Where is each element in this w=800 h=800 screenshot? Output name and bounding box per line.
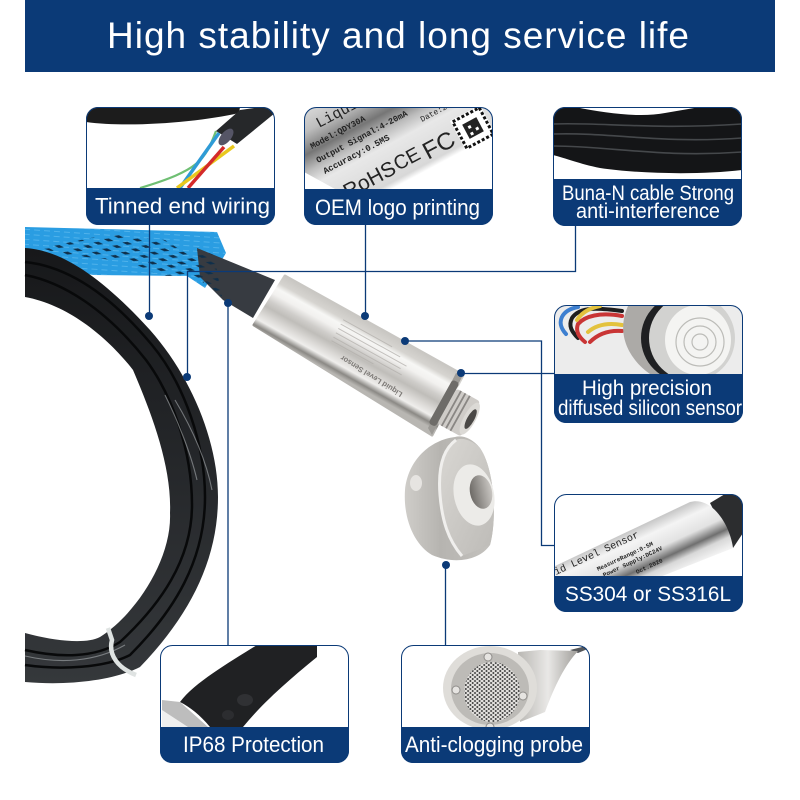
product photo: sensor cable gland	[197, 248, 275, 318]
panel: OEM logo printing: RoHS	[340, 157, 400, 203]
panel: Buna-N cable	[553, 107, 742, 226]
panel: diffused silicon sensor: diffused silicon sensor	[558, 397, 742, 420]
panel: stainless steel SS304 or SS316L: Oct.2020	[635, 557, 664, 576]
panel: OEM logo printing: Output Signal:4-20mA	[315, 109, 410, 166]
product photo: blue protective net	[25, 227, 226, 288]
product photo: stainless steel protective cap	[405, 436, 500, 560]
panel: tinned end wiring	[86, 105, 275, 225]
panel: IP68 protection: IP68 Protection	[183, 732, 324, 757]
product photo: stainless steel sensor body	[254, 276, 488, 443]
panel: diffused silicon sensor: High precision	[582, 377, 712, 400]
panel: OEM logo printing: OEM logo printing	[315, 195, 480, 220]
title banner: High stability and long service life	[107, 15, 689, 56]
panel: stainless steel SS304 or SS316L: id Level Sensor	[553, 530, 641, 579]
panel: Buna-N cable: Buna-N cable Strong	[562, 182, 734, 205]
product photo: coiled black cable	[25, 248, 218, 683]
panel: Buna-N cable: anti-interference	[576, 200, 720, 223]
panel: anti-clogging probe: Anti-clogging probe	[405, 732, 583, 757]
panel: OEM logo printing: CE	[390, 143, 424, 175]
panel: OEM logo printing: Model:QDY30A	[309, 114, 368, 152]
leader lines and marker dots	[150, 225, 576, 645]
panel: diffused silicon sensor	[554, 294, 743, 423]
panel: OEM logo printing: Accuracy:0.5MS	[322, 133, 392, 177]
panel: stainless steel SS304 or SS316L: MeasureRange:0-5M	[596, 540, 655, 573]
panel: anti-clogging probe	[401, 645, 590, 763]
panel: OEM logo printing	[304, 96, 496, 225]
panel: OEM logo printing: FC	[418, 126, 460, 165]
panel: stainless steel SS304 or SS316L	[553, 494, 743, 612]
panel: IP68 protection	[160, 645, 349, 763]
title banner	[25, 0, 775, 72]
panel: OEM logo printing: Liqui	[313, 96, 361, 132]
panel: tinned end wiring: Tinned end wiring	[95, 194, 270, 218]
panel: stainless steel SS304 or SS316L: SS304 or SS316L	[565, 583, 731, 606]
sensor engraved label: Liquid Level Sensor	[339, 353, 404, 399]
threaded connector	[428, 379, 488, 443]
QR code	[450, 108, 492, 149]
panel: stainless steel SS304 or SS316L: Power Supply:DC24V	[602, 545, 664, 579]
cable tie	[108, 628, 136, 675]
panel: OEM logo printing: Date:2020	[419, 96, 462, 125]
